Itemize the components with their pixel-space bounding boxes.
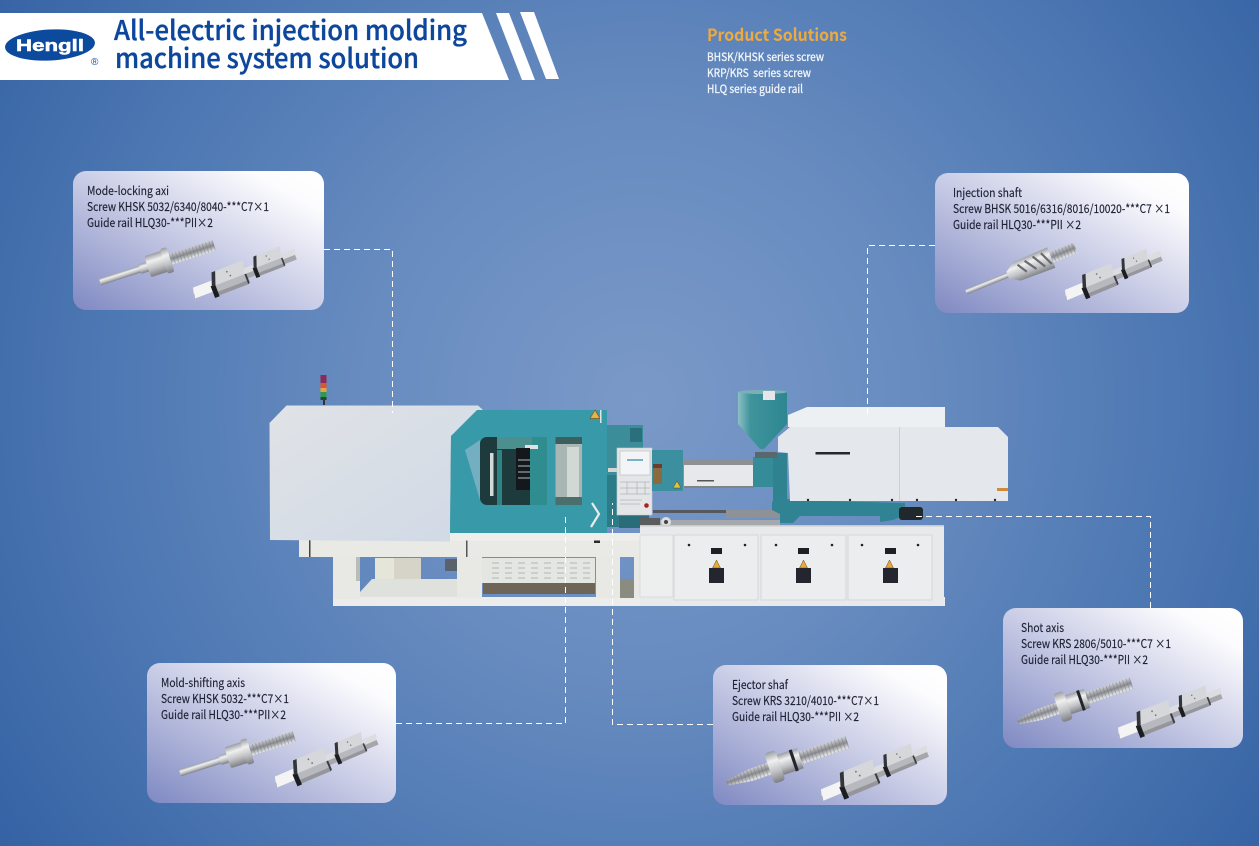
signal tower xyxy=(320,375,326,405)
panel text: Screw BHSK 5016/6316/8016/10020-***C7 ×1 xyxy=(953,200,1170,217)
connector: mold-shifting axis xyxy=(396,513,566,724)
cabinet door 3 xyxy=(848,535,932,600)
product solutions list xyxy=(707,49,824,97)
panel text: Guide rail HLQ30-***PII×2 xyxy=(87,214,213,231)
panel: mode-locking axis xyxy=(73,171,324,310)
injection carriage rods xyxy=(640,450,787,527)
panel text: Screw KHSK 5032/6340/8040-***C7×1 xyxy=(87,198,269,215)
icon: ball screw xyxy=(962,238,1080,302)
electrical cabinet xyxy=(640,525,944,606)
panel text: Shot axis xyxy=(1021,619,1064,636)
injection molding machine xyxy=(270,375,1008,606)
teal safety door xyxy=(450,410,607,533)
icon: guide rail xyxy=(816,738,934,807)
connector: mode-locking axis xyxy=(324,250,392,413)
panel: shot axis xyxy=(1003,608,1243,748)
title: All-electric injection molding xyxy=(114,9,467,48)
banner shape xyxy=(0,13,509,80)
panel text: Guide rail HLQ30-***PII ×2 xyxy=(953,216,1081,233)
icon: guide rail xyxy=(270,727,383,794)
icon: guide rail xyxy=(1060,244,1167,306)
dashed connector lines xyxy=(324,246,1150,724)
icon: ball screw xyxy=(1013,669,1136,736)
hopper xyxy=(738,390,787,449)
product solutions xyxy=(707,21,847,97)
panel text: Ejector shaf xyxy=(732,676,789,693)
product solutions list: KRP/KRS series screw xyxy=(707,65,811,81)
panel text xyxy=(1021,619,1171,668)
panel text: Screw KHSK 5032-***C7×1 xyxy=(161,690,289,707)
machine base frame xyxy=(299,538,945,606)
cabinet door 2 xyxy=(761,535,846,600)
product solutions heading: Product Solutions xyxy=(707,21,847,46)
product solutions list: HLQ series guide rail xyxy=(707,81,803,97)
header banner xyxy=(0,9,559,80)
panel text: Injection shaft xyxy=(953,184,1022,201)
panel text xyxy=(87,182,269,231)
white strip under door xyxy=(450,533,640,540)
Hengli logo xyxy=(4,27,99,68)
warning sign xyxy=(590,410,600,418)
cabinet door 1 xyxy=(674,535,758,600)
icon: ball screw xyxy=(722,727,853,798)
panel text xyxy=(161,674,289,723)
injection unit base xyxy=(772,495,923,523)
door window xyxy=(465,437,582,505)
decorative slanted stripes xyxy=(496,12,559,80)
panel text: Guide rail HLQ30-***PII ×2 xyxy=(1021,651,1148,668)
icon: ball screw xyxy=(96,233,218,294)
connector: injection shaft xyxy=(868,246,935,415)
panel: injection shaft xyxy=(935,173,1189,313)
panel text: Mold-shifting axis xyxy=(161,674,245,691)
door handle xyxy=(591,503,599,527)
Hengli logo: ® xyxy=(91,57,99,68)
panel text xyxy=(732,676,879,725)
connector: ejector shaft xyxy=(612,503,713,724)
product solutions list: BHSK/KHSK series screw xyxy=(707,49,824,65)
panel text: Guide rail HLQ30-***PII ×2 xyxy=(732,708,859,725)
icon: guide rail xyxy=(1113,680,1227,745)
panel text: Guide rail HLQ30-***PII×2 xyxy=(161,706,286,723)
control panel xyxy=(617,448,652,515)
panel: mold-shifting axis xyxy=(147,663,396,803)
panel: ejector shaft xyxy=(713,665,947,807)
panel text: Screw KRS 3210/4010-***C7×1 xyxy=(732,692,879,709)
panel text xyxy=(953,184,1170,233)
title: machine system solution xyxy=(115,37,419,76)
title xyxy=(114,9,467,76)
connector: shot axis xyxy=(912,516,1150,608)
clamping guard xyxy=(270,406,483,542)
injection unit cover xyxy=(778,407,1008,501)
icon: guide rail xyxy=(188,242,301,305)
panel text: Screw KRS 2806/5010-***C7 ×1 xyxy=(1021,635,1171,652)
Hengli logo: Hengll xyxy=(16,37,84,55)
panel text: Mode-locking axi xyxy=(87,182,169,199)
icon: ball screw xyxy=(176,724,298,785)
teal rear block xyxy=(607,425,649,528)
